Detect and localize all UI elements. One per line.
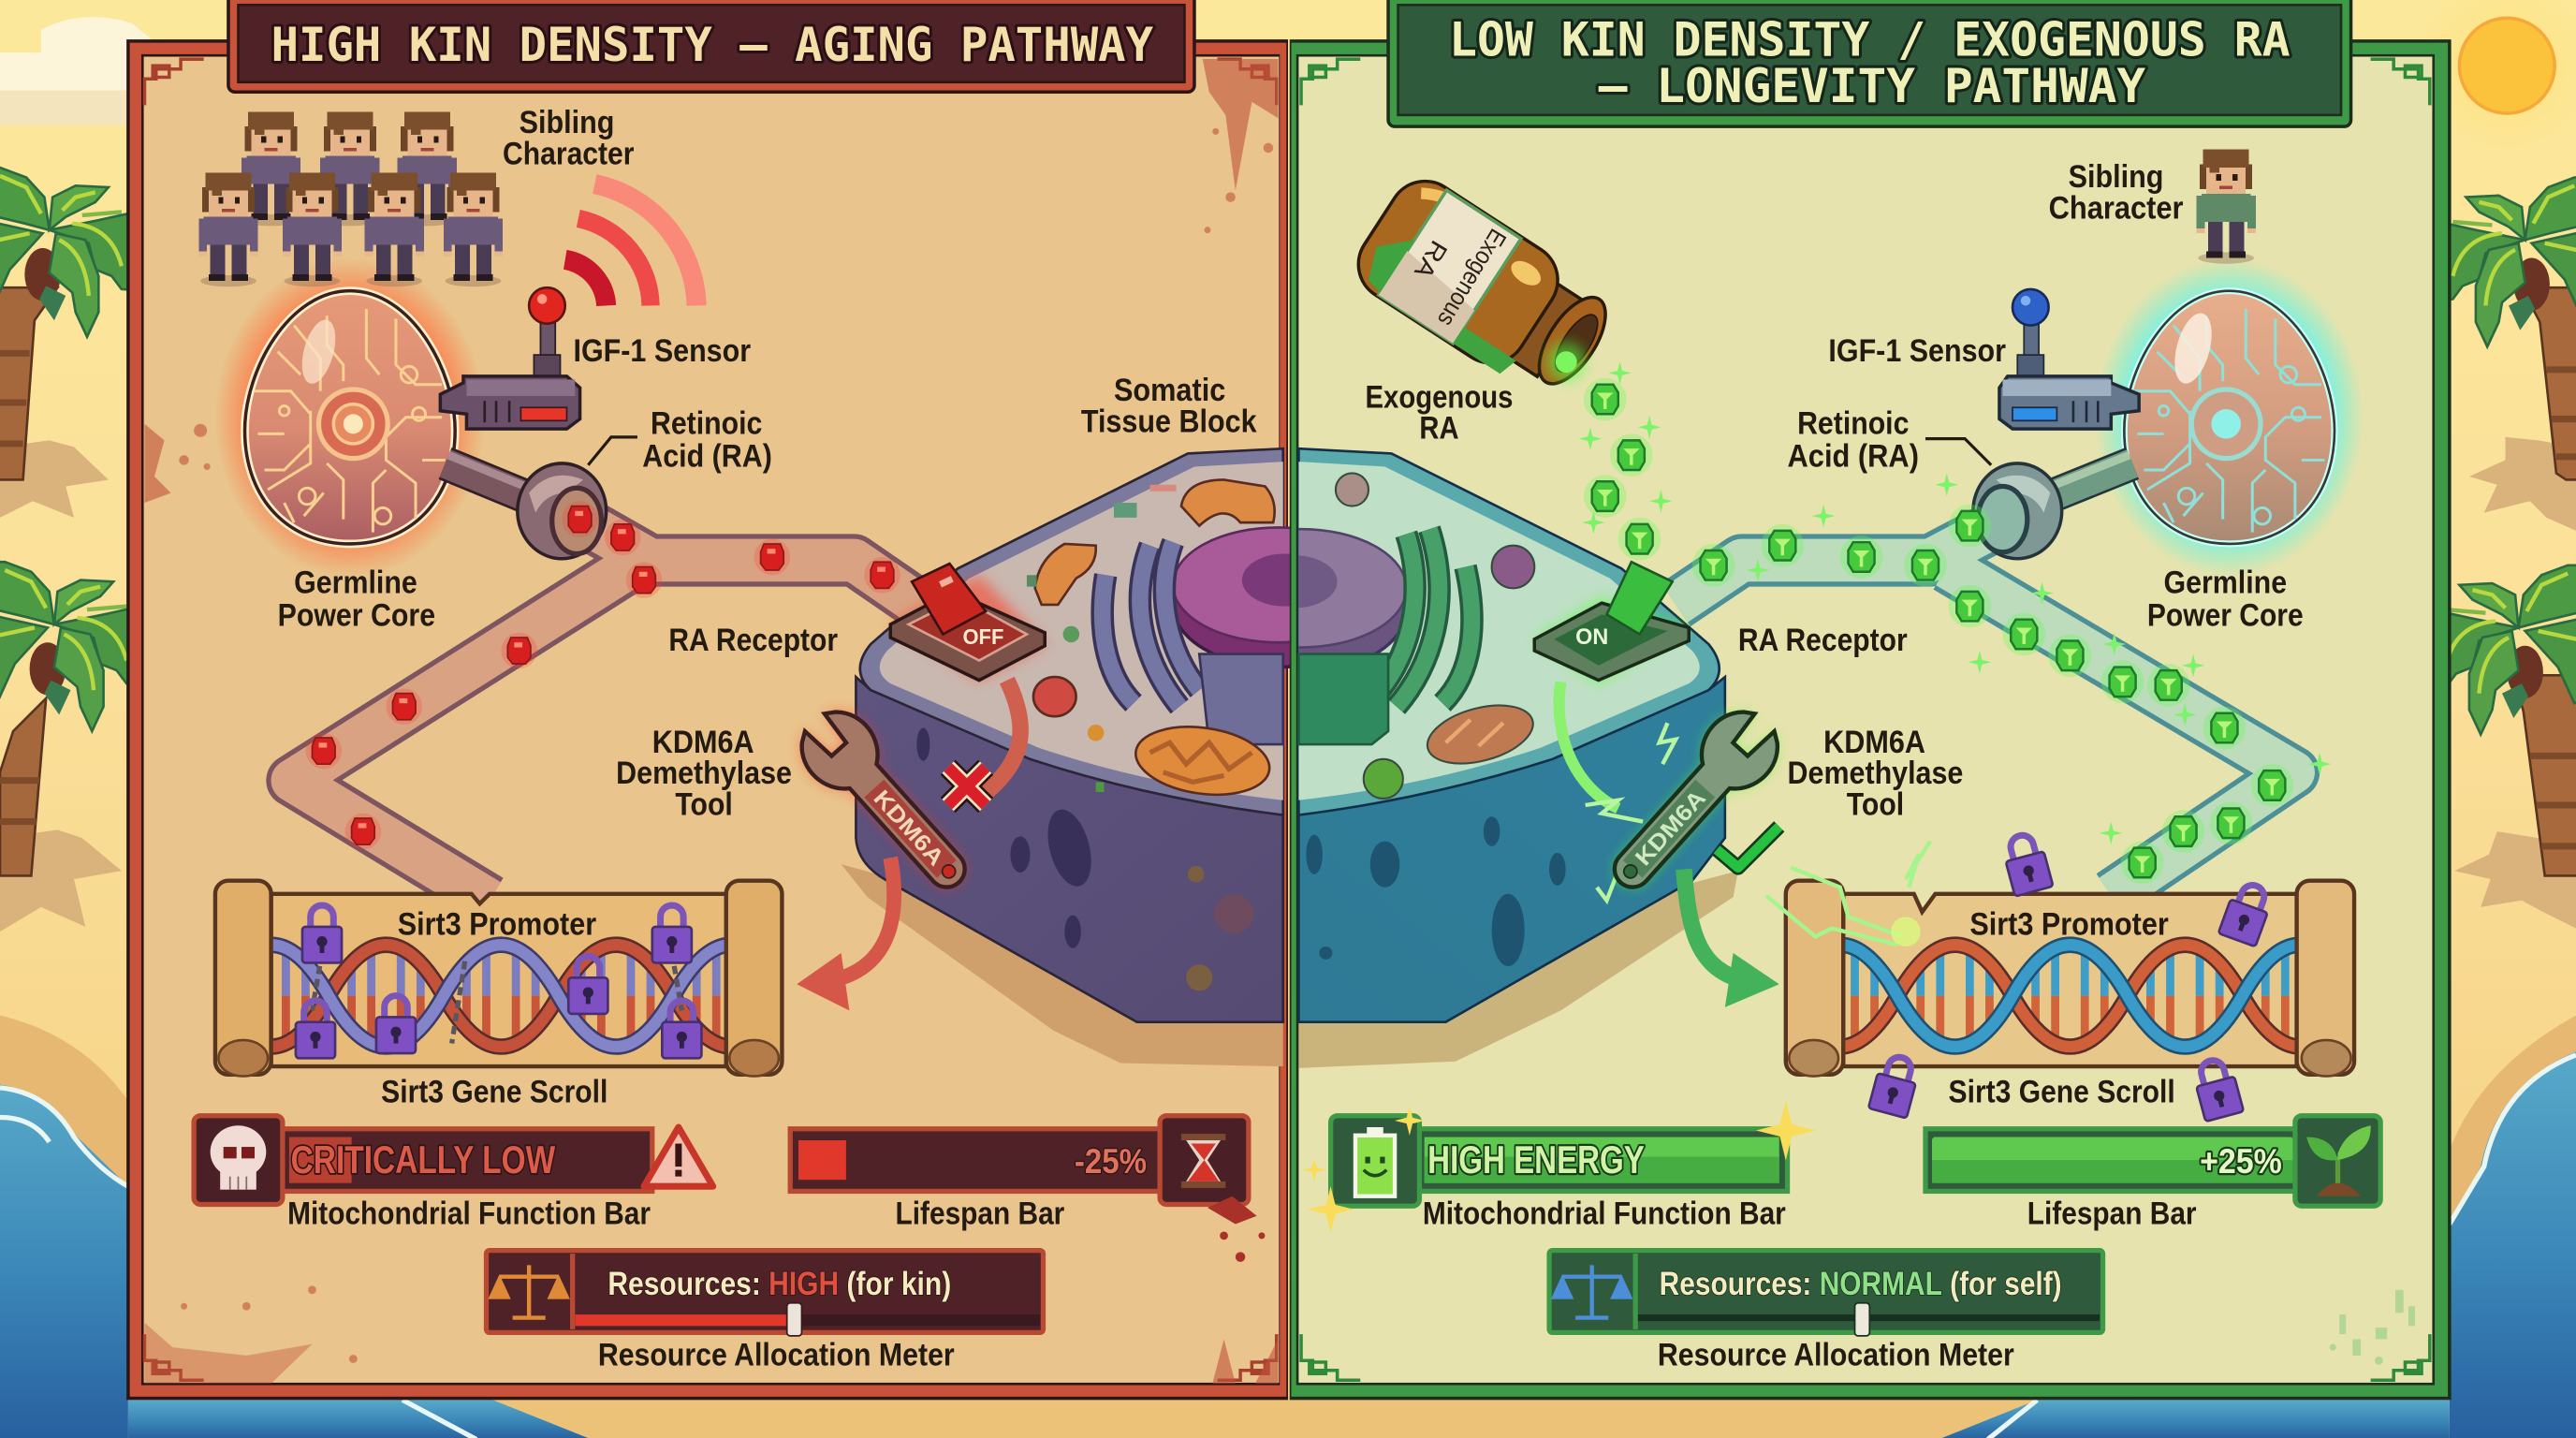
labels left: Character xyxy=(503,137,634,172)
labels left: Demethylase xyxy=(616,756,792,791)
labels right: RA Receptor xyxy=(1738,623,1908,658)
labels right: Resource Allocation Meter xyxy=(1658,1337,2014,1372)
egg glow right xyxy=(2095,258,2364,577)
cell block shadow left xyxy=(842,864,1283,1066)
labels right: Sirt3 Gene Scroll xyxy=(1949,1075,2175,1110)
palm trees left xyxy=(0,168,178,875)
labels left: KDM6A xyxy=(652,725,754,760)
kdm6a wrench right: KDM6A xyxy=(1631,785,1711,871)
labels right: Lifespan Bar xyxy=(2027,1196,2197,1232)
labels left: Acid (RA) xyxy=(642,438,772,474)
labels right: KDM6A xyxy=(1823,725,1925,760)
egg glow left xyxy=(215,258,485,577)
labels left: RA Receptor xyxy=(668,623,838,658)
kdm6a wrench right xyxy=(1594,698,1792,906)
sun xyxy=(2415,0,2576,157)
nucleus right xyxy=(1298,528,1404,653)
exogenous ra bottle xyxy=(1344,168,1627,413)
meter text right: Resources: NORMAL (for self) xyxy=(1660,1266,2062,1302)
panel: high kin density aging pathway xyxy=(126,39,1383,1400)
rollers xyxy=(215,881,782,1075)
palm shadows xyxy=(0,437,2576,932)
labels left: Retinoic xyxy=(651,405,762,441)
labels left: IGF-1 Sensor xyxy=(574,333,751,369)
corner ornaments right xyxy=(1301,59,2430,1380)
active arrow from receptor xyxy=(1559,682,1618,809)
somatic tissue block left xyxy=(856,448,1383,1022)
bottle label: Exogenous xyxy=(1432,224,1512,331)
rollers right xyxy=(1786,881,2354,1075)
kdm6a wrench left: KDM6A xyxy=(869,785,949,872)
stains left xyxy=(144,59,1278,1384)
skull icon box xyxy=(194,1116,283,1204)
lightning near wrench xyxy=(1586,723,1676,901)
red x mark xyxy=(948,768,986,805)
panel frame right xyxy=(1290,39,2452,1400)
mitochondrial function bar right xyxy=(1303,1101,1816,1232)
small inclusions xyxy=(1027,485,1177,792)
germline power core right xyxy=(2124,291,2334,544)
resource allocation meter left xyxy=(487,1251,1043,1336)
ra receptor switch off: OFF xyxy=(962,624,1003,649)
labels right: Acid (RA) xyxy=(1788,438,1919,474)
slider right xyxy=(1638,1303,2100,1336)
resource pipe left xyxy=(446,455,529,498)
particles xyxy=(305,520,900,849)
panel frame left xyxy=(126,39,1288,1400)
panel: low kin density longevity pathway xyxy=(1196,39,2452,1400)
lifespan bar left xyxy=(790,1116,1249,1204)
ra particles flowing xyxy=(1584,378,2293,884)
energy sparkles xyxy=(1303,1101,1816,1232)
sprout icon xyxy=(2295,1116,2380,1206)
labels left: Tissue Block xyxy=(1081,404,1258,440)
igf signal waves xyxy=(565,184,696,305)
golgi base right xyxy=(1298,654,1388,744)
labels right: Germline xyxy=(2163,565,2287,601)
sea xyxy=(0,1051,2576,1438)
golgi base xyxy=(1199,654,1283,744)
sparkles xyxy=(1579,361,2331,844)
labels left: Mitochondrial Function Bar xyxy=(287,1196,651,1232)
title: low kin density: – LONGEVITY PATHWAY xyxy=(1599,59,2145,113)
title: high kin density xyxy=(228,0,1194,92)
scroll promoter label: Sirt3 Promoter xyxy=(398,907,596,943)
balanced scales icon xyxy=(1553,1265,1632,1318)
block side xyxy=(856,677,1283,1022)
kdm6a wrench left xyxy=(788,698,986,906)
block top xyxy=(860,448,1283,815)
foam xyxy=(0,1055,2576,1438)
mitochondrial function bar left xyxy=(194,1116,713,1204)
dna helix locked xyxy=(213,945,788,1047)
sirt3 gene scroll left xyxy=(213,881,788,1077)
chains xyxy=(312,953,681,1043)
lifespan bar left: -25% xyxy=(1075,1142,1147,1181)
receptor ring right xyxy=(1973,463,2062,559)
block holes xyxy=(916,728,1253,990)
block top right xyxy=(1298,448,1720,815)
title: low kin density: LOW KIN DENSITY / EXOGENOUS RA xyxy=(1449,13,2291,67)
aging pathway track xyxy=(292,520,929,901)
exogenous ra label: Exogenous xyxy=(1365,379,1513,415)
title: high kin density: HIGH KIN DENSITY – AGING PATHWAY xyxy=(271,18,1153,72)
labels right: Retinoic xyxy=(1797,405,1909,441)
labels right: Sibling xyxy=(2069,159,2163,195)
golgi xyxy=(1103,542,1199,707)
ra receptor switch on xyxy=(1534,562,1689,683)
block holes right xyxy=(1306,816,1566,966)
block side right xyxy=(1298,677,1725,1022)
wet sand xyxy=(0,1016,2576,1438)
title: low kin density xyxy=(1388,0,2351,126)
resource pipe right xyxy=(2047,455,2132,498)
scales icon xyxy=(490,1265,568,1318)
somatic tissue block right xyxy=(1297,448,1726,1023)
meter text: Resources: HIGH (for kin) xyxy=(607,1266,951,1302)
lifespan bar right: +25% xyxy=(2200,1142,2282,1181)
sibling character right xyxy=(2197,150,2256,264)
palm trees right xyxy=(2395,178,2576,875)
longevity pathway track xyxy=(1676,526,2293,896)
labels right: Demethylase xyxy=(1788,756,1963,791)
germline power core left xyxy=(245,291,455,544)
green check mark xyxy=(1717,827,1779,868)
labels right xyxy=(1365,159,2304,1372)
cell block shadow right xyxy=(1298,871,1738,1068)
labels left: Resource Allocation Meter xyxy=(598,1337,955,1372)
labels left: Somatic xyxy=(1114,373,1225,408)
labels left: Germline xyxy=(294,565,417,601)
labels left xyxy=(278,105,1258,1372)
battery icon box xyxy=(1331,1116,1419,1206)
scroll promoter label right: Sirt3 Promoter xyxy=(1969,907,2169,943)
labels left: Lifespan Bar xyxy=(896,1196,1064,1232)
labels right: IGF-1 Sensor xyxy=(1828,333,2006,369)
labels right: Character xyxy=(2049,190,2184,226)
lifespan bar right xyxy=(1925,1116,2380,1206)
labels left: Sirt3 Gene Scroll xyxy=(381,1075,607,1110)
ra receptor switch off xyxy=(890,564,1046,681)
labels right: Tool xyxy=(1847,787,1904,823)
green stains xyxy=(2330,1290,2415,1365)
debris left xyxy=(1208,1196,1265,1262)
status text: CRITICALLY LOW xyxy=(291,1138,555,1181)
labels right: RA xyxy=(1419,411,1459,447)
igf-1 sensor right xyxy=(1999,289,2139,429)
organelles right xyxy=(1336,473,1540,799)
warning icon xyxy=(644,1127,713,1186)
sibling characters left xyxy=(198,111,503,286)
organelles xyxy=(1033,479,1275,802)
igf-1 sensor left xyxy=(440,287,580,429)
labels left: Tool xyxy=(675,787,733,823)
resource allocation meter right xyxy=(1549,1251,2103,1336)
status text right: HIGH ENERGY xyxy=(1427,1138,1645,1181)
cloud xyxy=(0,17,230,125)
sirt3 gene scroll right xyxy=(1766,830,2358,1122)
labels left: Power Core xyxy=(278,598,435,634)
parchment right xyxy=(1843,894,2297,1066)
locks xyxy=(296,905,701,1058)
sibling label: Sibling xyxy=(520,105,614,140)
activation lightning xyxy=(1766,842,1930,946)
dna helix open xyxy=(1782,945,2358,1047)
released locks xyxy=(1868,830,2275,1122)
slider xyxy=(575,1303,1040,1336)
labels right: Power Core xyxy=(2147,598,2304,634)
blocked arrow from receptor xyxy=(983,681,1020,795)
labels right: Mitochondrial Function Bar xyxy=(1423,1196,1786,1232)
corner ornaments left xyxy=(144,59,1277,1380)
resulting arrow left xyxy=(797,858,894,1010)
bottle label: RA xyxy=(1409,236,1454,285)
parchment xyxy=(271,894,726,1066)
ra receptor switch on: ON xyxy=(1575,625,1608,650)
resulting arrow right xyxy=(1684,869,1779,1007)
golgi right xyxy=(1380,529,1471,707)
nucleus xyxy=(1173,527,1383,668)
hourglass icon xyxy=(1160,1116,1249,1204)
receptor ring left xyxy=(518,463,607,559)
